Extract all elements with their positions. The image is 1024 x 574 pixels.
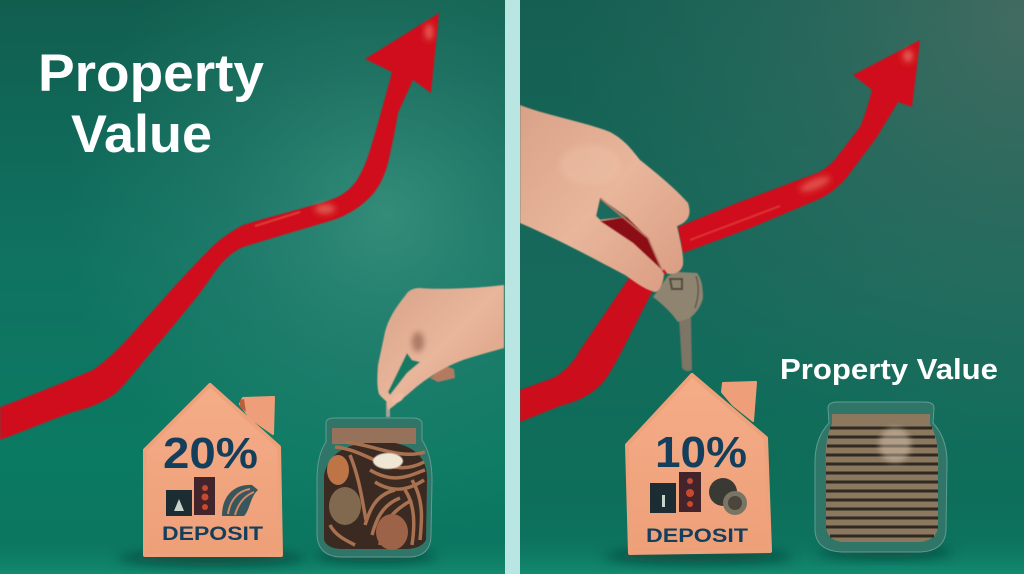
panel: 10% deposit <box>520 0 1024 574</box>
hand dropping coin <box>377 285 504 417</box>
heading: Property Value: Property <box>38 44 265 103</box>
label: 20%: 20% <box>163 429 258 478</box>
house: 10% deposit <box>603 375 793 563</box>
jar with stacked coins <box>815 402 953 558</box>
heading: Property Value: Property Value <box>780 354 998 386</box>
house: 20% deposit <box>117 385 307 565</box>
divider <box>505 0 520 574</box>
icons: deposit items <box>650 472 747 515</box>
heading: Property Value <box>38 44 265 164</box>
label: DEPOSIT: DEPOSIT <box>646 526 748 547</box>
hand holding key <box>520 105 690 292</box>
heading: Property Value: Value <box>71 105 212 164</box>
label: 10%: 10% <box>655 428 747 477</box>
jar with coins <box>313 418 437 562</box>
rising red arrow <box>0 13 439 440</box>
key <box>653 272 703 371</box>
icons: deposit items <box>166 477 258 516</box>
label: DEPOSIT: DEPOSIT <box>162 524 263 545</box>
panel: 20% deposit <box>0 0 505 574</box>
rising red arrow <box>520 40 920 422</box>
